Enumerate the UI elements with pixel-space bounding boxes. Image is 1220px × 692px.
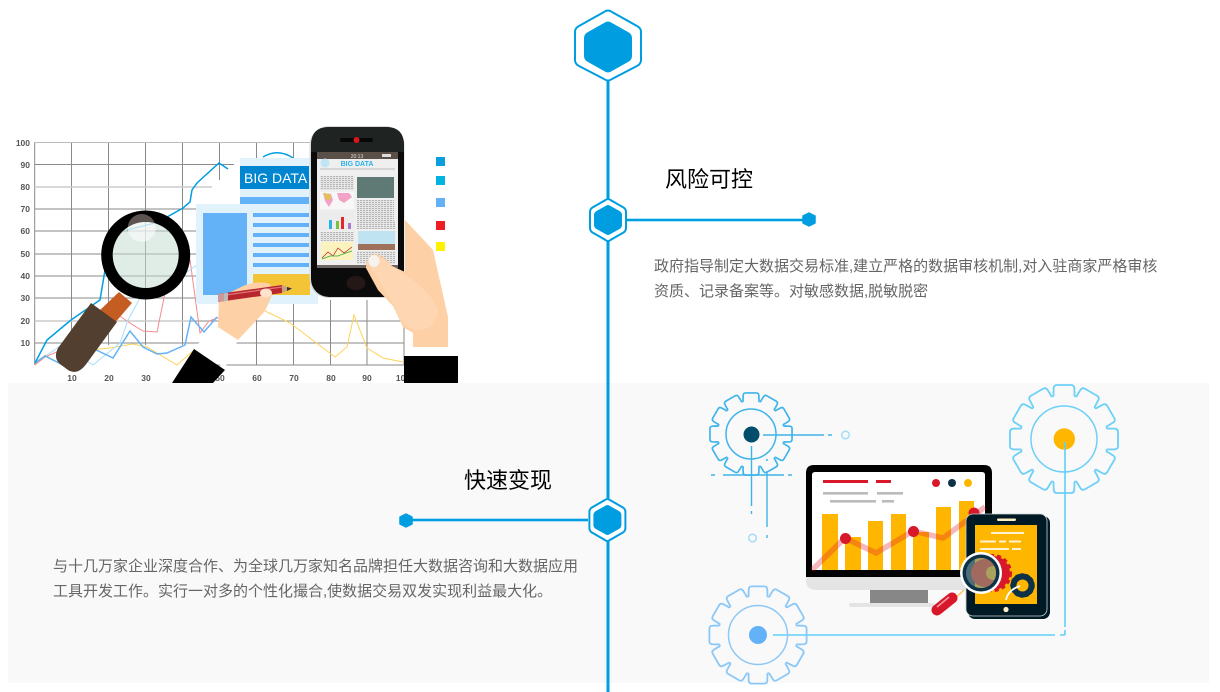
- x axis labels: 30: [141, 373, 151, 383]
- line chart: [16, 138, 410, 383]
- phone: [310, 126, 404, 298]
- legend squares: [436, 157, 445, 251]
- y axis labels: 100: [16, 138, 30, 148]
- y axis labels: 70: [21, 204, 30, 214]
- node: risk control connector: [590, 199, 815, 241]
- hand holding pen: [172, 282, 292, 383]
- text block: risk control: 政府指导制定大数据交易标准,建立严格的数据审核机制,对入驻商家严格审核: [654, 257, 1157, 275]
- heading: risk control: 风险可控: [665, 167, 753, 192]
- y axis labels: 50: [21, 249, 30, 259]
- x axis labels: 60: [252, 373, 262, 383]
- timeline: vertical line: [606, 80, 610, 692]
- phone screen: BIG DATA: [341, 161, 373, 168]
- icon: tablet with magnifier: [937, 514, 1050, 619]
- dark gear: [1012, 574, 1034, 596]
- x axis labels: 20: [104, 373, 114, 383]
- y axis labels: 90: [21, 160, 30, 170]
- x axis labels: 10: [67, 373, 77, 383]
- text block: fast monetisation: 工具开发工作。实行一对多的个性化撮合,使数据交易双发实现利益最大化。: [53, 582, 552, 600]
- icon: gear bottom left: [709, 586, 807, 684]
- icon: magnifying glass: [56, 210, 190, 372]
- heading: fast monetisation: 快速变现: [464, 468, 552, 493]
- icon: gear top right with connector: [773, 385, 1118, 635]
- x axis labels: 100: [396, 373, 410, 383]
- y axis labels: 40: [21, 271, 30, 281]
- x axis labels: [67, 373, 410, 383]
- x axis labels: 50: [215, 373, 225, 383]
- y axis labels: 30: [21, 293, 30, 303]
- text block: fast monetisation: 与十几万家企业深度合作、为全球几万家知名品牌担任大数据咨询和大数据应用: [53, 557, 578, 575]
- trend line: [812, 507, 985, 570]
- text block: risk control: [654, 257, 1157, 300]
- phone screen: [317, 152, 398, 268]
- document: big data sheet: BIG DATA: [244, 170, 308, 186]
- y axis labels: [16, 138, 30, 348]
- screen header marks: [823, 479, 972, 503]
- icon: top hexagon node: [575, 10, 641, 80]
- y axis labels: 20: [21, 316, 30, 326]
- y axis labels: 60: [21, 226, 30, 236]
- document: big data sheet: [196, 158, 318, 304]
- x axis labels: 90: [362, 373, 372, 383]
- text block: fast monetisation: [53, 557, 578, 600]
- phone screen: 20:13: [351, 154, 363, 160]
- hand holding phone: [366, 220, 458, 383]
- x axis labels: 80: [326, 373, 336, 383]
- bar chart: [822, 501, 974, 570]
- y axis labels: 10: [21, 338, 30, 348]
- panel: grey lower band: [8, 383, 1209, 683]
- y axis labels: 80: [21, 182, 30, 192]
- node: fast monetisation connector: [400, 499, 625, 541]
- illustration: big data chart with phone: [16, 126, 458, 383]
- x axis labels: 70: [289, 373, 299, 383]
- text block: risk control: 资质、记录备案等。对敏感数据,脱敏脱密: [654, 282, 928, 300]
- icon: gear top left with connectors: [710, 393, 849, 542]
- red gear: [976, 556, 1010, 590]
- magnifier on tablet: [937, 552, 1002, 610]
- icon: desktop monitor with bar chart: [806, 465, 992, 607]
